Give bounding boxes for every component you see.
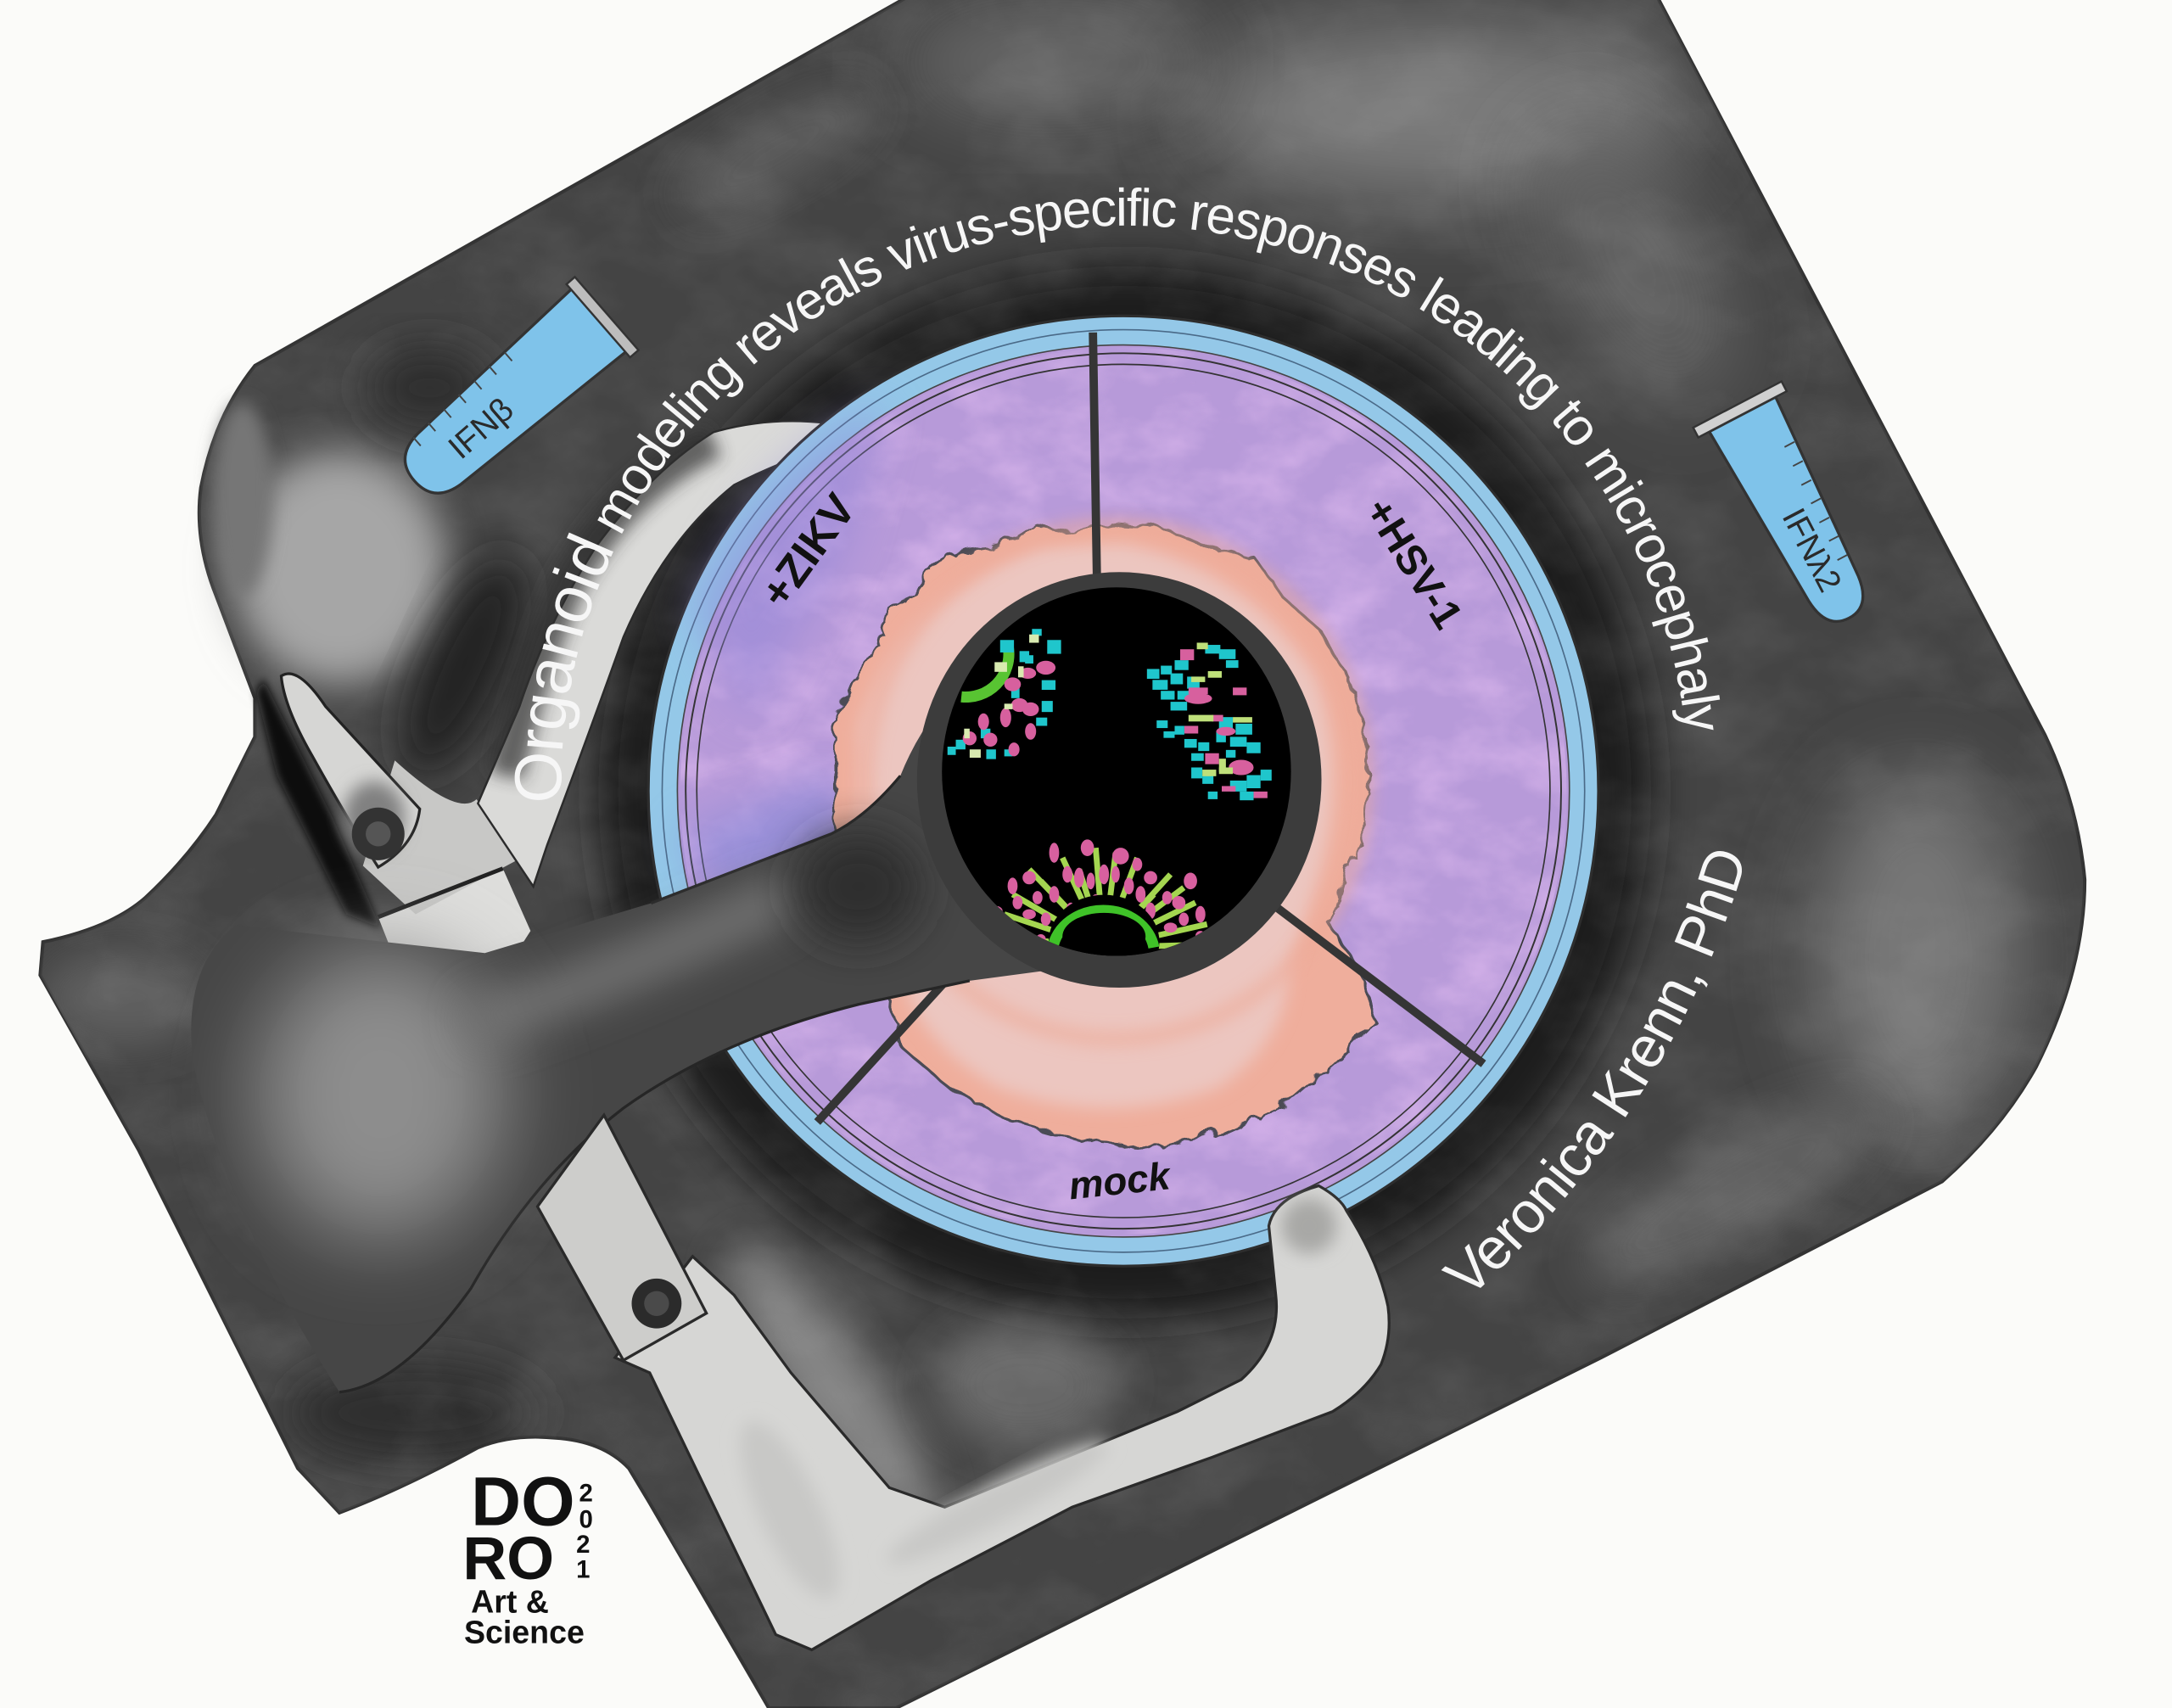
- holder arm and bulb: [191, 665, 1053, 1392]
- petri dish plate: [648, 316, 1598, 1266]
- organoid: mock cluster: [997, 839, 1208, 955]
- signature: DORO Art & Science 2021: 2: [579, 1480, 593, 1508]
- handle clamp block with screw: [537, 1115, 707, 1360]
- divider spokes: [817, 333, 1484, 1122]
- tube: IFNβ: IFNβ: [442, 391, 520, 467]
- signature: DORO Art & Science 2021: Art &: [471, 1583, 549, 1619]
- lower handle: [615, 1186, 1389, 1649]
- signature: DORO Art & Science 2021: 1: [576, 1556, 591, 1584]
- organoid: +HSV-1 cluster: [1147, 642, 1272, 800]
- tube: IFNβ: [383, 277, 639, 518]
- upper-left latch shading: [212, 346, 551, 928]
- signature: DORO Art & Science 2021: Science: [464, 1614, 585, 1649]
- signature: DORO Art & Science 2021: RO: [462, 1525, 554, 1593]
- title on arc: Organoid modeling reveals virus-specific responses leading to microcephaly: [514, 187, 1721, 800]
- central well: [917, 572, 1322, 988]
- signature: DORO Art & Science 2021: 0: [579, 1506, 593, 1534]
- author credit: Veronica Krenn, PhD: [1441, 851, 1742, 1288]
- signature: DORO Art & Science 2021: [462, 1463, 593, 1649]
- signature: DORO Art & Science 2021: 2: [576, 1531, 591, 1559]
- latch clamp: white strip below: [363, 760, 530, 966]
- plate label: +ZIKV: +ZIKV: [751, 485, 865, 617]
- tube: IFNλ2: IFNλ2: [1775, 502, 1848, 598]
- plate label: +HSV-1: +HSV-1: [1356, 490, 1471, 637]
- tube: IFNλ2: [1693, 382, 1893, 641]
- plate label: mock: mock: [1066, 1154, 1174, 1207]
- latch tip with pivot: [281, 674, 420, 867]
- peach tissue zone: [831, 521, 1371, 1145]
- latch arm with white sliver: [478, 421, 876, 887]
- signature: DORO Art & Science 2021: DO: [471, 1463, 575, 1540]
- organoid: +ZIKV cluster: [948, 629, 1061, 759]
